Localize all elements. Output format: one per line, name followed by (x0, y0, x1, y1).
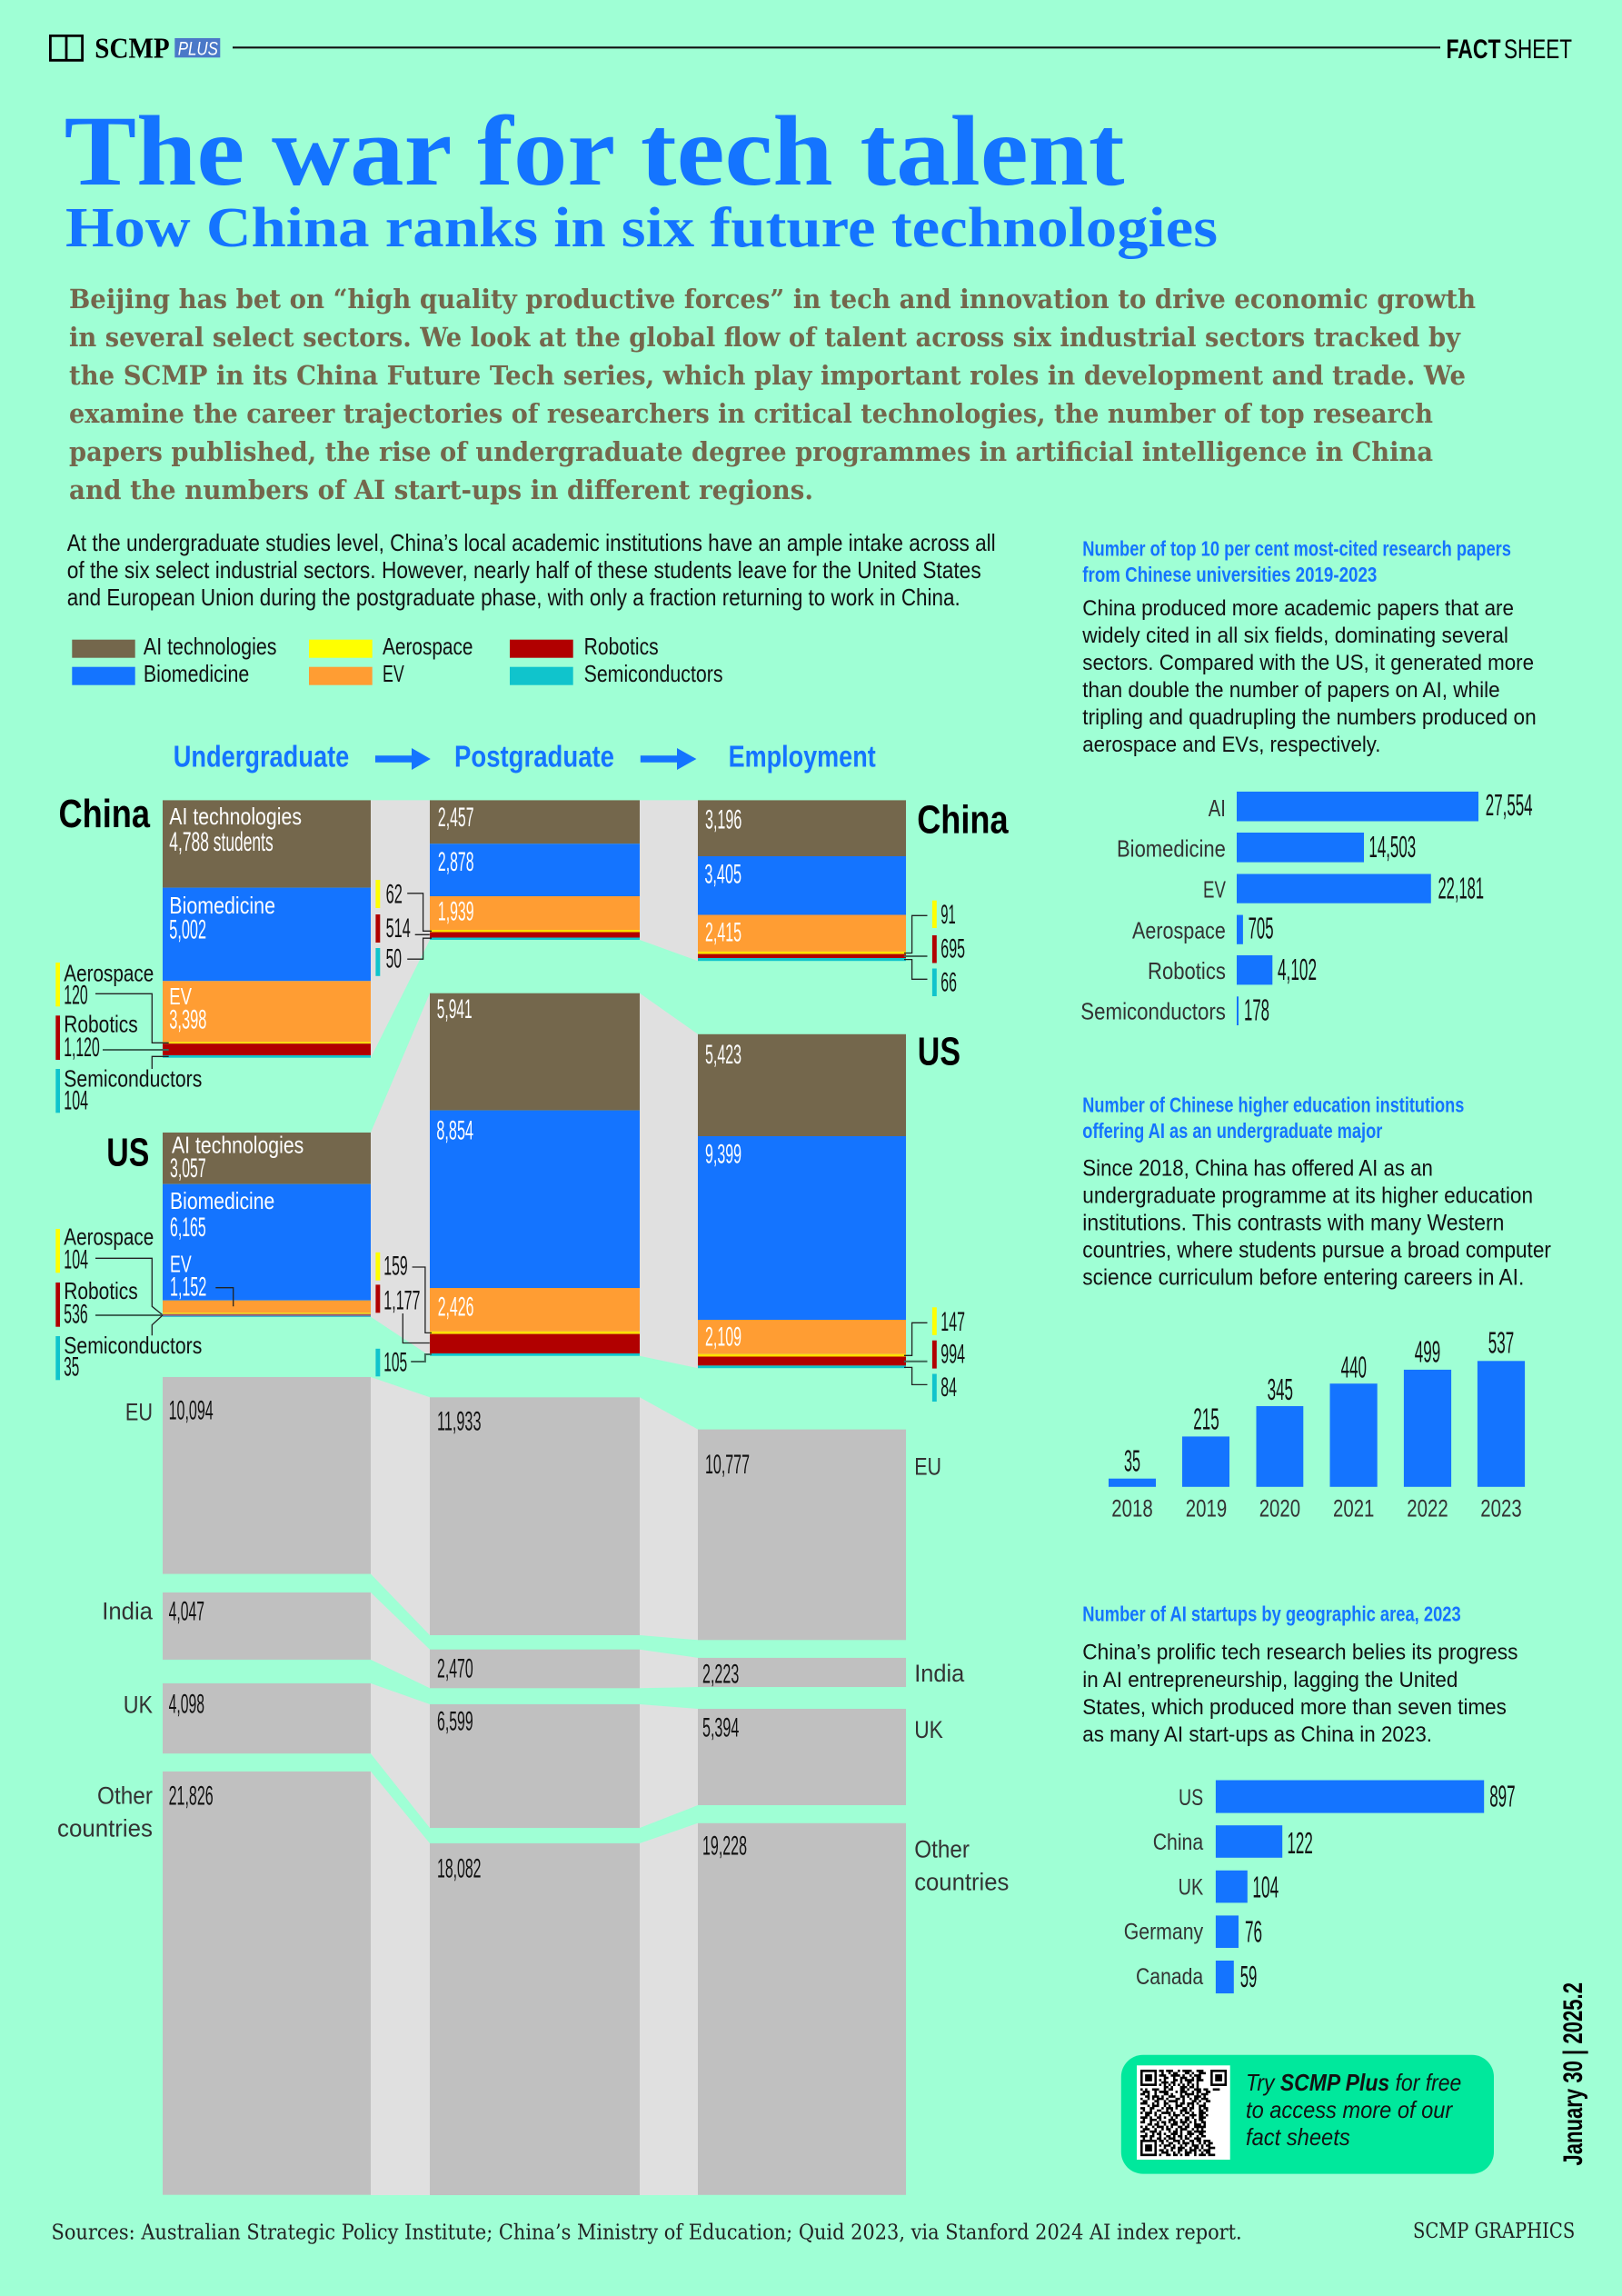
bar chart: AI programmes by year: 2020 (1259, 1494, 1300, 1522)
panel: AI undergraduate programmes (1082, 1093, 1551, 1522)
panel: other regions postgraduate: 11,933 (437, 1406, 482, 1436)
panel: other regions undergraduate (57, 1377, 371, 2195)
text: research papers: aerospace and EVs, respectively. (1082, 733, 1380, 757)
callouts: China postgraduate small sectors: 50 (386, 944, 402, 974)
bar chart: AI programmes by year: 345 (1268, 1373, 1293, 1406)
text: research papers: China produced more academic papers that are (1082, 596, 1514, 621)
panel: other regions postgraduate: 18,082 (437, 1853, 482, 1883)
panel: China employment stack (698, 800, 906, 961)
bar chart: AI programmes by year: 215 (1193, 1403, 1219, 1436)
callouts: China employment small sectors (904, 900, 965, 997)
bar chart: AI start-ups: UK (1179, 1874, 1203, 1900)
panel: China postgraduate stack (430, 800, 640, 940)
bar chart: research papers: Aerospace (1132, 916, 1226, 943)
legend: AI technologies (144, 633, 276, 660)
panel: other regions employment: countries (914, 1869, 1009, 1896)
panel: other regions employment: 2,223 (702, 1659, 739, 1689)
panel: other regions undergraduate: 4,047 (169, 1597, 204, 1627)
panel: China undergraduate stack: 3,398 (169, 1005, 206, 1035)
bar chart: research papers: 14,503 (1368, 830, 1416, 863)
promo text: fact sheets (1246, 2123, 1350, 2151)
panel: other regions employment: EU (914, 1452, 941, 1480)
callouts: China postgraduate small sectors: 514 (386, 913, 411, 943)
panel: other regions postgraduate: 2,470 (437, 1654, 473, 1683)
panel: research papers (1080, 536, 1537, 1027)
US heading right: US (918, 1029, 960, 1073)
panel: other regions postgraduate: 6,599 (437, 1707, 473, 1737)
bar chart: AI programmes by year: 2022 (1407, 1494, 1448, 1522)
fact sheet label (1447, 35, 1572, 65)
promo text: Try SCMP Plus for free (1246, 2069, 1461, 2096)
bar chart: research papers: Semiconductors (1080, 997, 1226, 1024)
intro paragraph: and the numbers of AI start-ups in different regions. (69, 474, 813, 505)
icon: QR code (1137, 2065, 1230, 2160)
callouts: China employment small sectors: 91 (940, 900, 956, 930)
sources: Sources: Australian Strategic Policy Institute; China’s Ministry of Education; Quid 2023, via Stanford 2024 AI index report. (51, 2221, 1242, 2245)
bar chart: research papers: 178 (1244, 993, 1269, 1027)
bar chart: AI start-ups: 897 (1489, 1780, 1516, 1813)
bar chart: research papers: Biomedicine (1117, 835, 1226, 863)
bar chart: research papers: AI (1209, 794, 1226, 822)
panel: other regions undergraduate: India (102, 1598, 154, 1625)
promo text: to access more of our (1246, 2096, 1454, 2123)
flow description paragraph: and European Union during the postgraduate phase, with only a fraction returning to work in China. (67, 584, 960, 611)
fact sheet label: FACT (1447, 35, 1501, 65)
panel: US employment stack: 2,109 (705, 1323, 741, 1353)
heading: AI programmes: Number of Chinese higher education institutions (1082, 1093, 1464, 1116)
callouts: US employment small sectors: 147 (940, 1307, 965, 1337)
date stamp: January 30 | 2025.2 (1558, 1982, 1588, 2166)
callouts: US undergraduate small sectors: 536 (64, 1299, 88, 1329)
SCMP wordmark: SCMP (95, 31, 170, 64)
bar chart: AI start-ups: Germany (1124, 1920, 1204, 1945)
callouts: China undergraduate small sectors: Semiconductors (64, 1065, 202, 1093)
bar chart: AI programmes by year: 499 (1415, 1334, 1440, 1369)
bar chart: AI start-ups: 104 (1252, 1870, 1279, 1903)
intro paragraph (69, 284, 1476, 505)
panel: other regions employment: UK (914, 1716, 943, 1743)
panel: China undergraduate stack: AI technologies (169, 803, 302, 830)
heading: AI programmes (1082, 1093, 1464, 1143)
callouts: US employment small sectors: 84 (940, 1373, 957, 1403)
arrow: undergraduate to postgraduate (375, 748, 431, 770)
panel: other regions undergraduate: countries (57, 1814, 153, 1842)
arrow: postgraduate to employment (641, 748, 696, 770)
callouts: China undergraduate small sectors: Robotics (64, 1011, 138, 1038)
stage headings with arrows: Employment (729, 740, 876, 774)
panel: US undergraduate stack: AI technologies (172, 1132, 304, 1159)
stage headings with arrows: Undergraduate (174, 740, 349, 774)
panel: other regions undergraduate: UK (124, 1691, 153, 1718)
panel: China employment stack: 2,415 (705, 917, 741, 947)
stage headings with arrows: Postgraduate (454, 740, 614, 774)
bar chart: AI programmes by year: 2023 (1480, 1494, 1522, 1522)
bar chart: AI programmes by year (1109, 1325, 1525, 1522)
bar chart: AI programmes by year: 2019 (1186, 1494, 1227, 1522)
callouts: China employment small sectors: 695 (940, 934, 965, 964)
callouts: China postgraduate small sectors (375, 880, 432, 976)
bar chart: AI start-ups: US (1179, 1785, 1203, 1811)
text: AI start-ups: in AI entrepreneurship, lagging the United (1082, 1668, 1458, 1692)
legend: Robotics (584, 633, 659, 660)
bar chart: AI programmes by year: 35 (1124, 1444, 1140, 1478)
text: AI programmes: countries, where students pursue a broad computer (1082, 1238, 1551, 1263)
callouts: China undergraduate small sectors: 120 (64, 981, 88, 1011)
intro paragraph: papers published, the rise of undergraduate degree programmes in artificial intelligence in China (69, 436, 1433, 467)
text: research papers: widely cited in all six fields, dominating several (1081, 624, 1508, 648)
bar chart: AI programmes by year: 440 (1341, 1351, 1367, 1384)
text: AI start-ups: China’s prolific tech research belies its progress (1082, 1641, 1518, 1665)
panel: China postgraduate stack: 1,939 (438, 896, 474, 927)
credit: SCMP GRAPHICS (1413, 2220, 1575, 2243)
panel: US employment stack: 5,423 (705, 1040, 741, 1070)
intro paragraph: the SCMP in its China Future Tech series, which play important roles in development and trade. We (69, 360, 1466, 391)
callouts: China undergraduate small sectors (55, 959, 202, 1116)
promo text (1246, 2069, 1461, 2151)
callouts: US employment small sectors (904, 1307, 965, 1403)
callouts: US employment small sectors: 994 (940, 1340, 965, 1370)
panel: US postgraduate stack: 8,854 (436, 1115, 473, 1145)
bar chart: AI programmes by year: 2018 (1111, 1494, 1153, 1522)
heading: AI programmes: offering AI as an undergraduate major (1082, 1119, 1382, 1143)
panel: China employment stack: 3,196 (705, 805, 741, 834)
panel: China undergraduate stack: Biomedicine (169, 892, 275, 919)
bar chart: research papers: 22,181 (1438, 871, 1484, 904)
heading: AI start-ups: Number of AI startups by geographic area, 2023 (1082, 1602, 1461, 1626)
panel: US undergraduate stack: Biomedicine (170, 1187, 274, 1214)
panel: US undergraduate stack: EV (170, 1250, 192, 1277)
text: AI programmes: undergraduate programme at its higher education (1082, 1183, 1533, 1209)
panel: other regions employment: Other (914, 1836, 970, 1863)
text: AI programmes: science curriculum before entering careers in AI. (1082, 1265, 1524, 1291)
heading: research papers (1082, 536, 1511, 586)
heading: research papers: Number of top 10 per cent most-cited research papers (1082, 536, 1511, 560)
callouts: US undergraduate small sectors: 104 (64, 1244, 88, 1274)
callouts: US undergraduate small sectors: Semiconductors (64, 1332, 202, 1359)
bar chart: AI start-ups (1124, 1780, 1516, 1993)
panel: other regions undergraduate: 10,094 (169, 1396, 214, 1425)
panel: other regions employment: 10,777 (705, 1450, 750, 1480)
legend: EV (383, 660, 404, 687)
intro paragraph: in several select sectors. We look at the global flow of talent across six industrial sectors tracked by (69, 322, 1461, 353)
flow description paragraph: At the undergraduate studies level, China’s local academic institutions have an ample intake across all (67, 529, 996, 556)
legend: Biomedicine (144, 660, 249, 687)
legend (72, 633, 723, 687)
panel: US undergraduate stack: 1,152 (170, 1273, 206, 1303)
callouts: US postgraduate small sectors: 1,177 (383, 1285, 420, 1315)
bar chart: AI start-ups: Canada (1136, 1964, 1203, 1990)
legend: Aerospace (383, 633, 473, 660)
text: research papers: sectors. Compared with the US, it generated more (1082, 651, 1534, 675)
text: research papers (1081, 596, 1537, 757)
panel: other regions postgraduate (430, 1397, 640, 2195)
panel: other regions employment: 5,394 (702, 1712, 739, 1742)
bar chart: research papers: Robotics (1148, 957, 1226, 984)
US heading left: US (106, 1130, 149, 1174)
callouts: US postgraduate small sectors: 105 (383, 1347, 407, 1377)
flow connectors (371, 800, 698, 2195)
text: research papers: than double the number of papers on AI, while (1082, 678, 1500, 703)
text: AI start-ups: States, which produced more than seven times (1082, 1695, 1507, 1720)
callouts: US postgraduate small sectors (375, 1252, 432, 1377)
text: research papers: tripling and quadrupling the numbers produced on (1082, 705, 1537, 730)
text: AI programmes: institutions. This contrasts with many Western (1082, 1210, 1504, 1235)
text: AI programmes (1082, 1155, 1551, 1291)
callouts: US undergraduate small sectors: 35 (64, 1353, 79, 1383)
panel: China postgraduate stack: 2,878 (438, 847, 474, 877)
flow description paragraph (67, 529, 996, 611)
bar chart: AI programmes by year: 2021 (1333, 1494, 1374, 1522)
intro paragraph: examine the career trajectories of researchers in critical technologies, the number of top research (69, 398, 1433, 429)
panel: other regions employment: India (914, 1660, 965, 1687)
panel: China employment stack: 3,405 (704, 860, 741, 890)
intro paragraph: Beijing has bet on “high quality productive forces” in tech and innovation to drive economic growth (69, 284, 1476, 314)
callouts: China undergraduate small sectors: Aerospace (64, 959, 154, 986)
panel: other regions undergraduate: 4,098 (169, 1690, 204, 1720)
panel: US employment stack: 9,399 (705, 1139, 741, 1169)
panel: China undergraduate stack: EV (169, 983, 192, 1010)
text: AI programmes: Since 2018, China has offered AI as an (1082, 1155, 1433, 1181)
panel: US undergraduate stack: 6,165 (170, 1213, 206, 1243)
fact sheet label: SHEET (1504, 35, 1572, 65)
callouts: US undergraduate small sectors (55, 1223, 202, 1383)
bar chart: research papers (1080, 788, 1533, 1027)
panel: other regions undergraduate: Other (97, 1782, 153, 1809)
panel: China undergraduate stack: 5,002 (169, 914, 206, 945)
callouts: China undergraduate small sectors: 1,120 (64, 1033, 100, 1063)
panel: US postgraduate stack: 2,426 (438, 1292, 473, 1322)
callouts: US undergraduate small sectors: Aerospace (64, 1223, 154, 1251)
PLUS badge: PLUS (178, 39, 218, 60)
China heading left: China (58, 792, 150, 836)
panel: China undergraduate stack (163, 800, 371, 1058)
panel: China postgraduate stack: 2,457 (438, 803, 474, 833)
panel: AI start-ups (1082, 1602, 1518, 1993)
bar chart: research papers: 4,102 (1278, 953, 1317, 986)
panel: US postgraduate stack (430, 993, 640, 1356)
panel: US undergraduate stack: 3,057 (170, 1153, 206, 1183)
text: AI start-ups: as many AI start-ups as China in 2023. (1082, 1722, 1432, 1747)
panel: US undergraduate stack (163, 1132, 371, 1317)
text: AI start-ups (1082, 1641, 1518, 1747)
flow description paragraph: of the six select industrial sectors. However, nearly half of these students leave for the United States (67, 556, 981, 584)
bar chart: AI programmes by year: 537 (1488, 1325, 1514, 1360)
heading: research papers: from Chinese universities 2019-2023 (1082, 563, 1377, 586)
bar chart: AI start-ups: 59 (1240, 1960, 1257, 1993)
bar chart: research papers: 705 (1249, 911, 1274, 945)
bar chart: research papers: EV (1203, 875, 1226, 903)
panel: other regions employment (698, 1430, 1009, 2195)
panel: other regions undergraduate: EU (125, 1398, 153, 1425)
panel: US postgraduate stack: 5,941 (437, 994, 473, 1024)
China heading right: China (917, 797, 1009, 842)
panel: other regions employment: 19,228 (702, 1831, 747, 1862)
callouts: US undergraduate small sectors: Robotics (64, 1277, 138, 1304)
bar chart: AI start-ups: 122 (1287, 1826, 1313, 1860)
title: The war for tech talent (65, 95, 1125, 206)
bar chart: AI start-ups: 76 (1245, 1914, 1262, 1949)
callout: SCMP Plus promo (1121, 2055, 1494, 2174)
bar chart: AI start-ups: China (1153, 1830, 1203, 1855)
callouts: China postgraduate small sectors: 62 (386, 880, 403, 909)
stage headings with arrows (174, 740, 876, 774)
panel: US employment stack (698, 1034, 906, 1368)
icon: SCMP logo (50, 35, 83, 60)
subtitle: How China ranks in six future technologies (65, 197, 1218, 259)
callouts: China employment small sectors: 66 (940, 967, 957, 997)
callouts: US postgraduate small sectors: 159 (383, 1252, 408, 1282)
panel: other regions undergraduate: 21,826 (169, 1782, 214, 1811)
header bar (50, 31, 1572, 65)
bar chart: research papers: 27,554 (1486, 788, 1533, 822)
panel: China undergraduate stack: 4,788 students (169, 827, 274, 857)
callouts: China undergraduate small sectors: 104 (64, 1086, 88, 1116)
legend: Semiconductors (584, 660, 723, 687)
